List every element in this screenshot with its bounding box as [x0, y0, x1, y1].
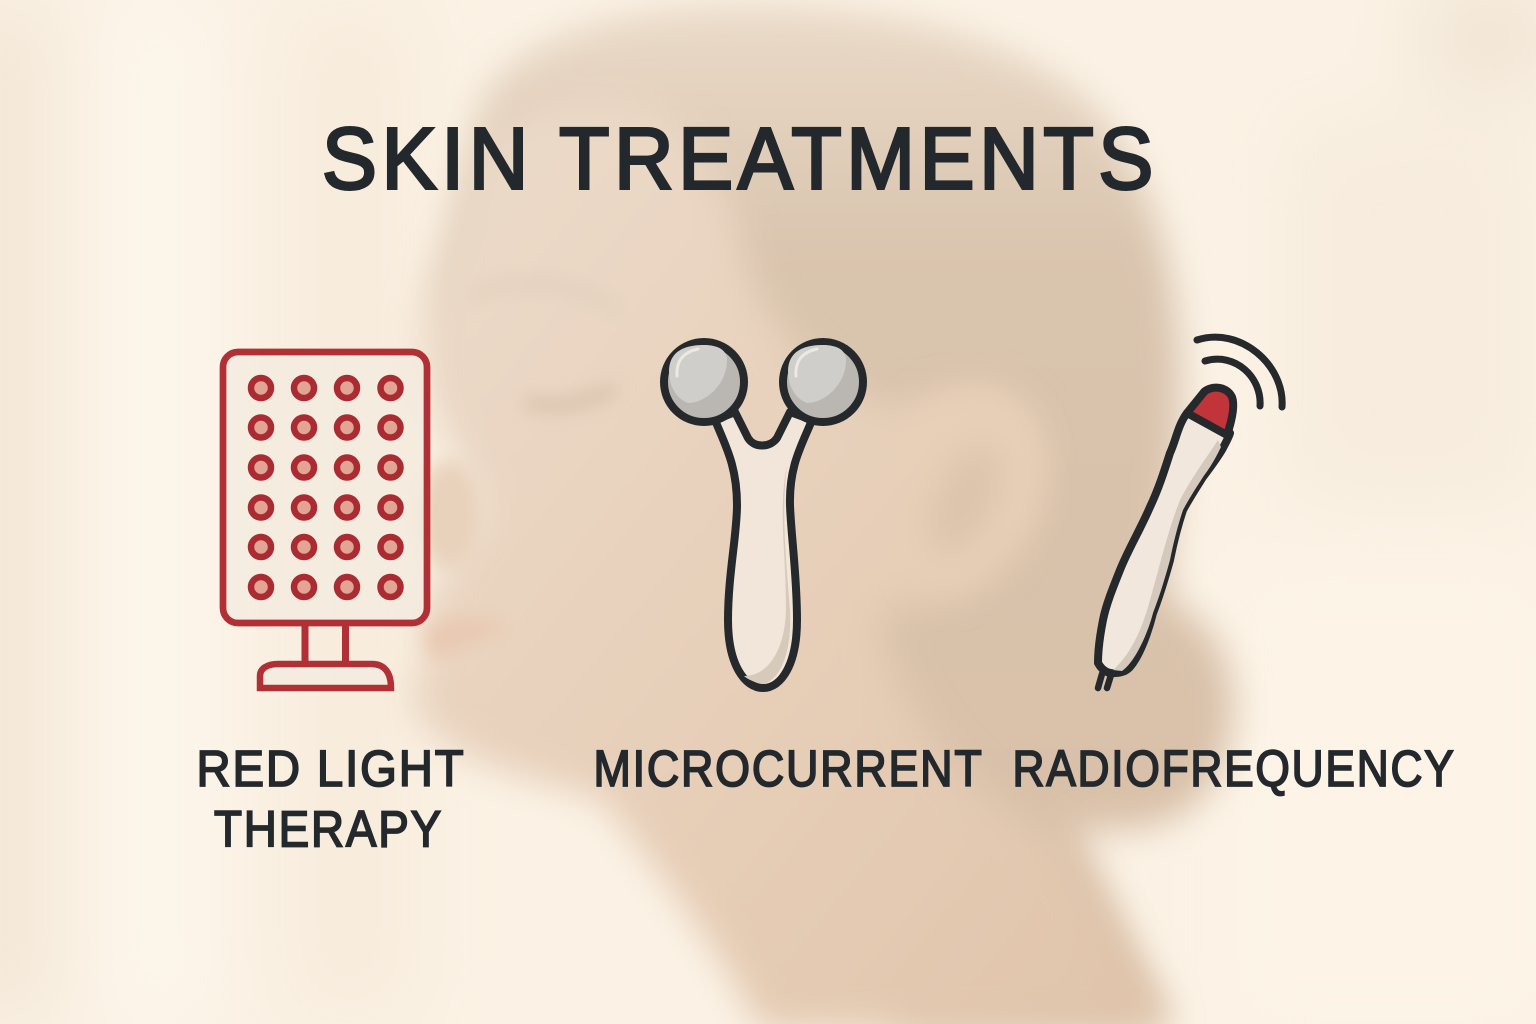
roller handle	[715, 412, 812, 688]
wand body	[1098, 413, 1230, 673]
icon: radiofrequency wand	[1098, 337, 1282, 688]
closed eye and brow	[525, 388, 615, 405]
label: red light therapy: RED LIGHT	[196, 740, 466, 797]
icon: red light therapy panel	[223, 352, 427, 688]
label: red light therapy: THERAPY	[214, 800, 443, 858]
cheek glow	[418, 460, 482, 570]
title: SKIN TREATMENTS	[322, 110, 1158, 208]
LED grid	[251, 378, 400, 597]
prongs	[1098, 674, 1111, 688]
signal waves	[1205, 359, 1260, 406]
label: radiofrequency: RADIOFREQUENCY	[1012, 740, 1456, 797]
right roller ball	[783, 342, 863, 422]
icon: microcurrent facial roller	[664, 342, 863, 688]
red tip	[1187, 388, 1233, 435]
face and neck	[411, 98, 1170, 1024]
label: microcurrent: MICROCURRENT	[594, 740, 984, 797]
head silhouette (hair)	[440, 5, 1234, 1024]
label: red light therapy	[196, 740, 466, 858]
ear	[905, 388, 1042, 592]
lips	[425, 617, 510, 660]
left roller ball	[664, 342, 744, 422]
